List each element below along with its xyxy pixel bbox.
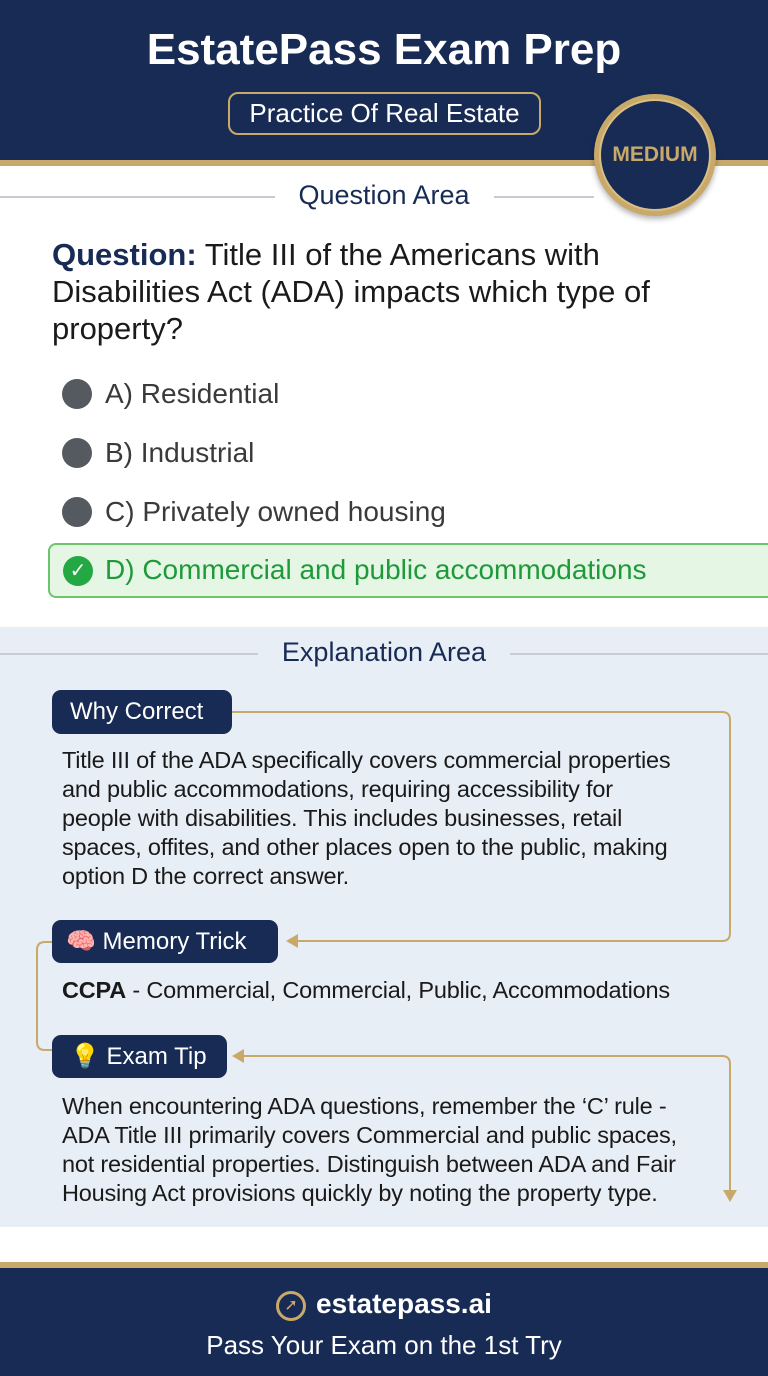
pill: exam tip: 💡 Exam Tip [70,1043,207,1070]
connector arrows [36,711,737,1202]
text: exam tip: ADA Title III primarily covers Commercial and public spaces, [62,1122,677,1148]
header banner [0,0,768,161]
text: why correct [62,747,670,889]
text: exam tip: When encountering ADA questions, remember the ‘C’ rule - [62,1093,666,1119]
subtitle pill [228,92,541,135]
text: why correct: and public accommodations, requiring accessibility for [62,776,613,802]
heading: explanation area: Explanation Area [282,637,486,667]
question text: Disabilities Act (ADA) impacts which type of [52,274,650,309]
option A: A) Residential [105,378,279,409]
text: exam tip: not residential properties. Distinguish between ADA and Fair [62,1151,676,1177]
question text [52,237,650,346]
subtitle pill: Practice Of Real Estate [249,98,520,128]
text: exam tip: Housing Act provisions quickly by noting the property type. [62,1180,658,1206]
pill: memory trick: 🧠 Memory Trick [66,928,247,955]
pill: memory trick [52,920,278,963]
option C: C) Privately owned housing [105,496,446,527]
title: EstatePass Exam Prep [147,25,621,74]
difficulty badge: MEDIUM [612,143,698,166]
footer [0,1262,768,1376]
text: why correct: option D the correct answer. [62,863,349,889]
option D correct: D) Commercial and public accommodations [105,554,647,585]
icon: check: ✓ [70,560,86,582]
text: memory trick: CCPA - Commercial, Commercial, Public, Accommodations [62,977,670,1003]
question text: property? [52,311,183,346]
text: why correct: spaces, offites, and other places open to the public, making [62,834,667,860]
text: why correct: Title III of the ADA specifically covers commercial properties [62,747,670,773]
icon: check [63,556,93,586]
question text: Question: Title III of the Americans with [52,237,600,272]
text: why correct: people with disabilities. This includes businesses, retail [62,805,622,831]
option B: B) Industrial [105,437,254,468]
difficulty badge [594,94,716,216]
brand: estatepass.ai [316,1288,492,1319]
option D correct [48,543,768,598]
brand: ➚ [284,1297,298,1314]
pill: why correct: Why Correct [70,698,203,725]
pill: exam tip [52,1035,227,1078]
tagline: Pass Your Exam on the 1st Try [206,1330,562,1360]
text: exam tip [62,1093,677,1206]
pill: why correct [52,690,232,734]
panel: explanation [0,627,768,1227]
heading: question area: Question Area [298,180,470,210]
